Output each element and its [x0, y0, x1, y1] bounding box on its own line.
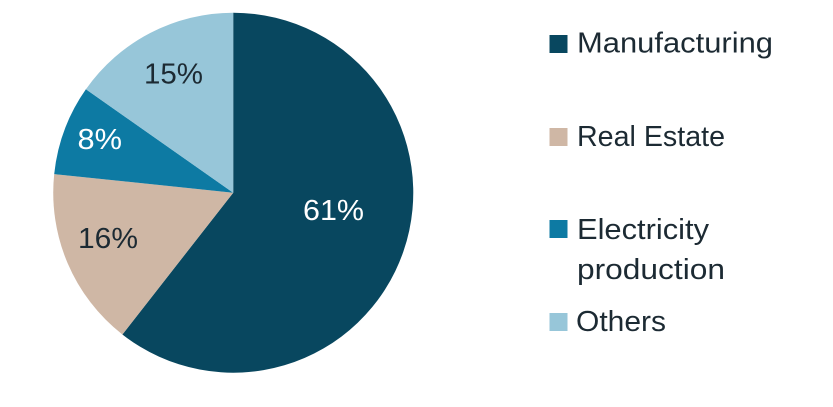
slice: Others 15% — [86, 13, 233, 193]
legend item: Real Estate: Real Estate — [577, 121, 725, 153]
label: 61%: 61% — [303, 195, 364, 227]
label: 15%: 15% — [144, 58, 203, 90]
slice: Manufacturing 61% — [122, 13, 413, 373]
label: 8%: 8% — [78, 124, 122, 156]
legend item: Others: Others — [576, 306, 666, 338]
slice: Electricity production 8% — [54, 89, 233, 193]
label: 16%: 16% — [78, 223, 138, 255]
pie chart — [53, 13, 413, 373]
legend — [550, 28, 773, 338]
legend item: Electricity production — [550, 214, 725, 286]
slice: Real Estate 16% — [53, 174, 233, 334]
legend item: Electricity production: Electricity — [577, 214, 710, 246]
legend item: Electricity production: production — [577, 254, 725, 286]
legend item: Manufacturing: Manufacturing — [577, 28, 773, 60]
